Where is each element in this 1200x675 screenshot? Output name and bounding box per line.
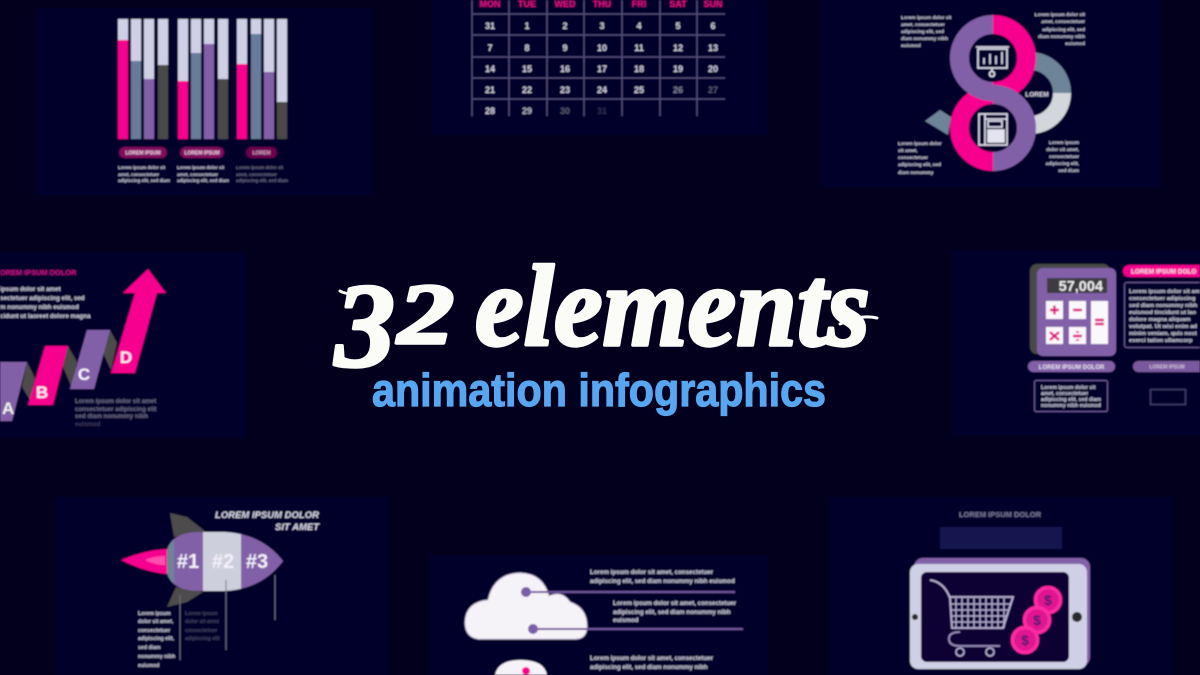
icon: dollar coins (1012, 588, 1060, 652)
rocket text column 1: consectetuer (138, 628, 170, 634)
calendar dates: 26 (673, 85, 683, 95)
purple pill right: LOREM IPSUM (1149, 364, 1185, 370)
rocket labels: #1 (177, 551, 199, 573)
calendar dates: 18 (634, 64, 644, 74)
text block 2: Lorem ipsum dolor sit amet, consectetuer (613, 600, 737, 607)
arrow segment D: D (120, 348, 132, 367)
calendar dates: 23 (560, 85, 570, 95)
text block 2: adipiscing elit, sed diam nonummy nibh (613, 609, 731, 616)
text block top-right: euismod (1065, 41, 1085, 47)
title: 32 elements: 3 (334, 259, 395, 392)
text block 3: adipiscing elit, sed diam nonummy nibh (590, 664, 708, 671)
purple pill right (1133, 361, 1200, 372)
calendar dates: 31 (597, 106, 607, 116)
calendar dates: 4 (636, 21, 642, 31)
text block bottom-right: dolor sit amet, (1046, 147, 1080, 153)
text box left (1034, 380, 1108, 412)
calendar dates: 22 (522, 85, 532, 95)
ribbon connectors (22, 330, 117, 400)
arrow text block: sectetuer adipiscing elit, sed (0, 295, 85, 302)
calendar dates: 3 (599, 21, 605, 31)
panel: calculator (952, 250, 1200, 435)
text block 3: amet, consectetuer (236, 172, 277, 177)
label pill 2 (180, 147, 224, 158)
rocket text column 2: adipiscing elit (185, 636, 220, 642)
panel: rocket (55, 497, 388, 675)
text box right (1124, 282, 1200, 348)
connector line 1 (521, 587, 735, 597)
text block bottom-right: Lorem ipsum (1049, 140, 1079, 146)
label pill 1: LOREM IPSUM (125, 150, 161, 156)
heading bar (940, 527, 1062, 549)
pink heading pill: LOREM IPSUM DOLO (1131, 268, 1196, 276)
arrow lower text: euismod (75, 421, 101, 428)
pink heading pill (1123, 265, 1200, 277)
rocket text column 2: Lorem ipsum (185, 611, 218, 617)
purple pill left (1028, 361, 1115, 372)
text block top-right: adipiscing elit, sed (1042, 27, 1085, 33)
arrow lower text: consectetuer adipiscing elit (75, 406, 156, 413)
calendar dates: 31 (485, 21, 495, 31)
rocket labels: #3 (246, 551, 268, 573)
bar chart: group 1 (118, 19, 168, 139)
title: 32 elements: 2 (395, 266, 454, 362)
rocket heading: SIT AMET (275, 522, 320, 533)
calendar dates: 8 (524, 43, 530, 53)
rocket text column 1: dolor sit amet, (138, 619, 174, 625)
text block top-left: Lorem ipsum dolor sit (901, 15, 952, 21)
text box right: Lorem ipsum dolor sit am (1129, 289, 1200, 295)
purple pill left: LOREM IPSUM DOLOR (1039, 365, 1105, 371)
icon: calculator (1030, 264, 1116, 356)
calendar dates: 14 (485, 64, 495, 74)
ribbon segment B: B (36, 383, 48, 402)
text block 1: amet, consectetuer (118, 172, 159, 177)
calendar dates: 15 (522, 64, 532, 74)
text block top-right: amet, consectetuer (1041, 19, 1085, 25)
calendar dates: 20 (708, 64, 718, 74)
text block bottom-right: sed diam (1058, 168, 1079, 174)
ribbon segment A: A (2, 399, 14, 418)
text box right: minim veniam, quis nost (1129, 331, 1197, 337)
calendar dates: 16 (560, 64, 570, 74)
empty text box (1150, 390, 1186, 404)
text block top-right: Lorem ipsum dolor sit (1035, 12, 1085, 18)
text box right: exerci tation ullamcorp (1129, 338, 1193, 344)
label pill 3 (246, 147, 277, 158)
title: 32 elements: elements (475, 243, 870, 371)
calendar dates: 12 (673, 43, 683, 53)
ribbon segment B (28, 346, 68, 405)
rocket body (166, 530, 284, 592)
calendar dates: 1 (524, 21, 530, 31)
text box right: sed diam nonummy nibh (1129, 303, 1198, 309)
label pill 2: LOREM IPSUM (184, 150, 220, 156)
rocket labels: #2 (212, 551, 234, 573)
calendar grid (472, 0, 725, 116)
text box left: Lorem ipsum dolor sit (1041, 385, 1096, 391)
text box right: consectetuer adipiscing (1129, 296, 1196, 302)
rocket text column 1: adipiscing elit, (138, 636, 175, 642)
text block bottom-left: sit amet, (898, 148, 918, 154)
bar chart: group 2 (178, 19, 228, 139)
panel: shopping tablet (830, 497, 1172, 675)
text box left: amet, consectetuer (1041, 391, 1088, 397)
calendar dates: 17 (597, 64, 607, 74)
text block bottom-left: diam nonummy (898, 170, 934, 176)
text block top-left: adipiscing elit, sed (901, 29, 944, 35)
purple ring halves (960, 24, 1026, 162)
grey outer arc (1030, 61, 1062, 125)
text block 2: amet, consectetuer (177, 172, 218, 177)
arrow text block: cidunt ut laoreet dolore magna (0, 313, 91, 320)
pink ring halves (960, 24, 1026, 162)
calendar dates: 27 (708, 85, 718, 95)
calendar dates: 5 (675, 21, 681, 31)
calendar dates: 2 (562, 21, 568, 31)
text block 3: Lorem ipsum dolor sit amet, consectetuer (590, 655, 714, 662)
rocket flame (121, 549, 167, 574)
panel: cloud (430, 555, 768, 675)
text box right: dolore magna aliquam (1129, 317, 1191, 323)
arrow lower text: Lorem ipsum dolor sit amet (75, 398, 156, 405)
panel: stacked bar chart (35, 8, 372, 195)
rocket text column 1: Lorem ipsum (138, 611, 171, 617)
label pill 3: LOREM (252, 150, 271, 156)
text block bottom-left: adipiscing elit, sed (898, 162, 941, 168)
text block bottom-right: adipiscing elit, (1046, 161, 1080, 167)
text box right: volutpat. Ut wisi enim ad (1129, 324, 1197, 330)
arrow segment D (111, 269, 166, 373)
calculator display value: 57,004 (1059, 279, 1103, 295)
calendar dates: 9 (562, 43, 568, 53)
rocket text column 1: nonummy nibh (138, 654, 175, 660)
text block 3: adipiscing elit, sed diam (236, 178, 288, 183)
text block top-right: diam nonummy nibh (1038, 34, 1085, 40)
calendar weekday header (480, 0, 723, 9)
calendar dates: 28 (485, 106, 495, 116)
text block 1: Lorem ipsum dolor sit amet, consectetuer (590, 569, 714, 576)
calendar dates: 24 (597, 85, 607, 95)
text box left: nonummy nibh euismod (1041, 403, 1101, 409)
text block 2: euismod (613, 617, 639, 624)
grey arc stub (925, 110, 951, 135)
icon: dollar coins: $ (1044, 592, 1052, 608)
text block 1: adipiscing elit, sed diam (118, 178, 170, 183)
icon: cloud (465, 573, 587, 639)
rocket leader lines (180, 575, 275, 660)
rocket text column 2: dolor sit amet (185, 619, 219, 625)
title: 32 elements (334, 243, 877, 392)
rocket fins (167, 513, 206, 607)
tablet body (910, 558, 1090, 669)
text box right: euismod tincidunt ut lao (1129, 310, 1196, 316)
calendar dates: 21 (485, 85, 495, 95)
arrow text block: m nonummy nibh euismod (0, 304, 79, 311)
calendar dates: 6 (710, 21, 716, 31)
icon: shopping cart (930, 580, 1013, 656)
text block top-left: amet, consectetuer (901, 22, 945, 28)
text block top-left: euismod (901, 43, 921, 49)
rocket text column 1: sed diam (138, 645, 161, 651)
calendar dates: 19 (673, 64, 683, 74)
calendar dates: 29 (522, 106, 532, 116)
calendar dates: 10 (597, 43, 607, 53)
label pill 1 (119, 147, 167, 158)
text block bottom-right: consectetuer (1049, 154, 1079, 160)
calculator keys (1046, 301, 1108, 344)
panel: growth arrow (0, 252, 245, 438)
bar chart: group 3 (237, 19, 287, 139)
text block 1: Lorem ipsum dolor sit (118, 165, 166, 170)
calendar dates: 25 (634, 85, 644, 95)
text block 2: adipiscing elit, sed diam (177, 178, 229, 183)
arrow text block: ipsum dolor sit amet (0, 286, 61, 293)
icon: book (979, 114, 1007, 145)
panel: calendar (432, 0, 767, 135)
tablet heading: LOREM IPSUM DOLOR (959, 510, 1042, 519)
text box left: adipiscing elit, sed diam (1041, 397, 1101, 403)
rocket labels (177, 551, 268, 573)
text block 2: Lorem ipsum dolor sit (177, 165, 225, 170)
subtitle: animation infographics: animation infographics (372, 364, 826, 416)
text block 3: Lorem ipsum dolor sit (236, 165, 284, 170)
icon: dollar coins: $ (1033, 612, 1041, 628)
icon: dollar coins: $ (1021, 632, 1029, 648)
arrow lower text: sed diam nonummy nibh (75, 413, 148, 420)
text block bottom-left: Lorem ipsum dolor (898, 141, 942, 147)
connector line 2 (528, 624, 743, 634)
text block 1: adipiscing elit, sed diam nonummy nibh euismod (590, 578, 735, 585)
ribbon segment A (0, 362, 27, 421)
rocket text column 1: euismod (138, 663, 159, 669)
icon: second cloud (495, 660, 547, 675)
calendar dates (485, 21, 718, 116)
calendar dates: 30 (560, 106, 570, 116)
arrow heading: OREM IPSUM DOLOR (0, 268, 77, 277)
calendar dates: 11 (634, 43, 644, 53)
panel: figure-eight rings (822, 0, 1160, 187)
LOREM ring label: LOREM (1025, 92, 1049, 98)
text block top-left: diam nonummy nibh (901, 36, 948, 42)
calendar dates: 7 (487, 43, 493, 53)
text block bottom-left: consectetuer (898, 155, 928, 161)
ribbon segment C (70, 330, 110, 389)
ribbon segment C: C (78, 365, 90, 384)
rocket heading: LOREM IPSUM DOLOR (215, 510, 319, 521)
icon: presentation board (976, 47, 1009, 76)
rocket text column 2: consectetuer (185, 628, 217, 634)
calendar dates: 13 (708, 43, 718, 53)
